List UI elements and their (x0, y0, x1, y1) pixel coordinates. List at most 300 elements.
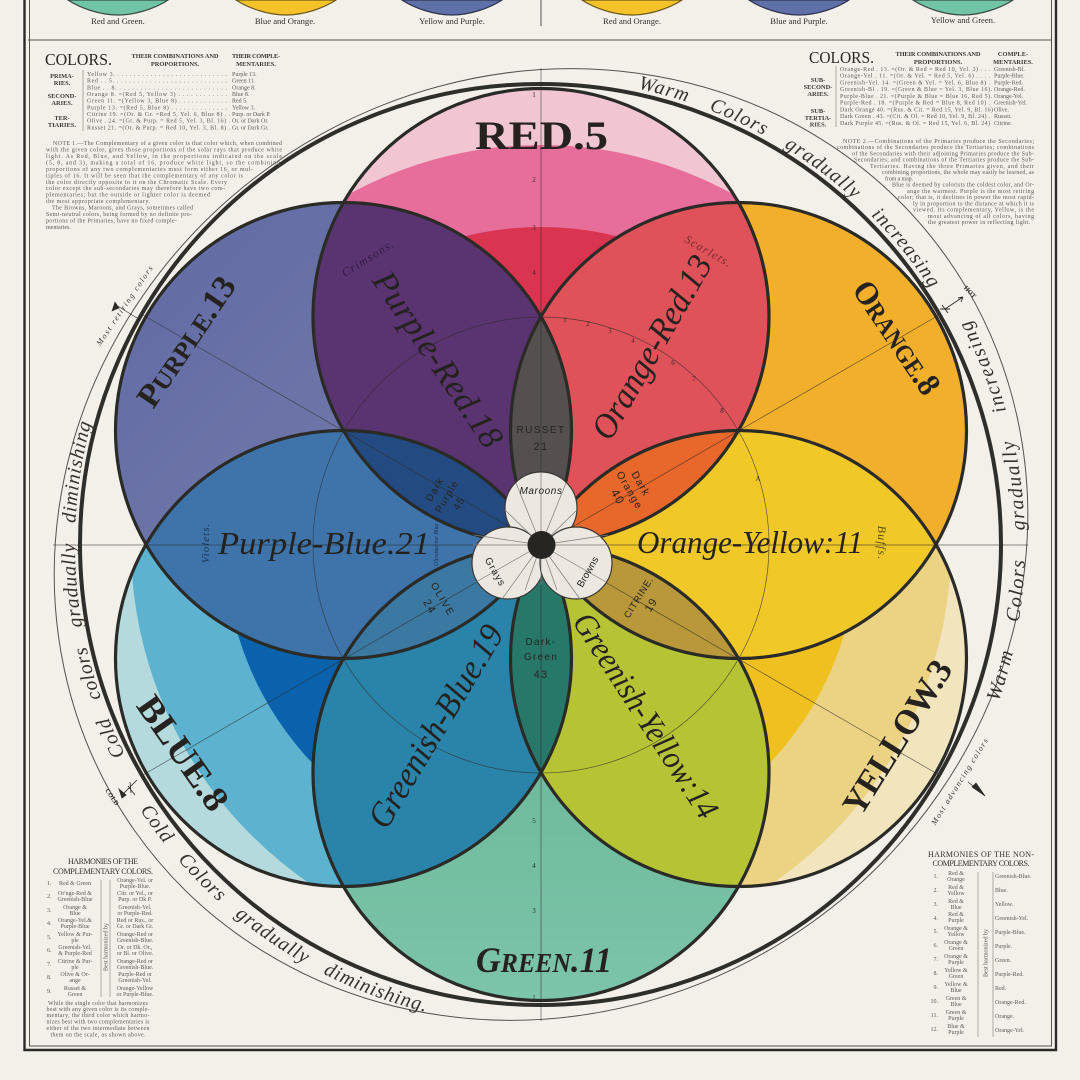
panel: harmonies of the complementary colors: Gr. or Dark Gr. (117, 924, 154, 930)
text block: note 1 (46, 140, 282, 231)
scale numbers: 5 (532, 817, 536, 825)
heading: COMPLEMENTARY COLORS. (53, 867, 153, 876)
text block: note 1: (5, 8, and 3), making a total of 16, produce white light, so the combining (46, 159, 280, 166)
label: Dark Purple: Dark (424, 476, 447, 504)
panel: colors table, left (45, 50, 280, 131)
text block: note 1: color except the sub-secondaries may therefore have two com- (46, 185, 225, 192)
lens: olive (313, 544, 769, 1000)
petal: orange-red (543, 204, 768, 496)
label: Dark Green: Dark- (526, 637, 556, 648)
panel: harmonies of the complementary colors: & Purple-Red (58, 951, 92, 957)
ring text: warm colors, right side: Warm Colors gradually increasing (962, 321, 1029, 698)
heading: COLORS. (809, 48, 874, 67)
panel: harmonies of the non-complementary colors: Yellow. (995, 902, 1014, 908)
top row: harmony swatches (68, 0, 1013, 26)
text block: note 2: ly in proportion to the distance at which it is (913, 201, 1035, 207)
panel: colors table, left: Yellow 3. (232, 105, 256, 111)
text block: note 2: most advancing of all colors, having (928, 213, 1034, 220)
panel: harmonies of the non-complementary colors: 9. (934, 985, 938, 991)
panel: harmonies of the complementary colors: Orange-Red or (117, 932, 153, 938)
panel: harmonies of the complementary colors: Citrine & Pur- (58, 959, 92, 965)
top row: harmony swatches: Red and Orange. (603, 16, 661, 26)
text block: note 1: tiples of 16. It will be seen that the complementary of any color is (46, 172, 244, 179)
label: Citrine: 19 (643, 596, 660, 614)
panel: harmonies of the complementary colors: 9. (47, 989, 52, 995)
panel: harmonies of the complementary colors: Greenish-Yel. (118, 905, 152, 911)
scale numbers: A (755, 475, 761, 483)
panel: colors table, left: SECOND- (48, 93, 76, 100)
lens: dark green (512, 577, 570, 769)
panel: colors table, left: TIARIES. (48, 122, 76, 129)
label: Citrine (622, 575, 669, 628)
panel: harmonies of the complementary colors: 1. (47, 881, 52, 887)
tertiary lenses (116, 88, 966, 1000)
panel: harmonies of the non-complementary colors: Red & (948, 912, 964, 918)
lens: citrine (586, 558, 736, 657)
text block: note 2: Blue is deemed by colorists the coldest color, and Or- (892, 183, 1034, 189)
panel: harmonies of the complementary colors: Orange-Red or (117, 959, 153, 965)
label: Violets: Violets. (200, 523, 212, 563)
panel: colors table, right: COMPLE- (998, 51, 1028, 58)
label: Purple-Blue: Purple-Blue.21 (217, 525, 430, 561)
panel: harmonies of the complementary colors: Or'nge-Red & (58, 891, 92, 897)
scale numbers: 3 (608, 327, 612, 335)
panel: harmonies of the complementary colors: 8. (47, 975, 52, 981)
panel: harmonies of the complementary colors: nizes best with two complementaries is (46, 1020, 150, 1026)
panel: harmonies of the non-complementary colors: Blue. (995, 888, 1008, 894)
text block: note 2: combinations of the Secondaries produce the Tertiaries; combinations (837, 144, 1035, 151)
scale numbers: 4 (532, 862, 536, 870)
panel: harmonies of the non-complementary colors: Orange (947, 877, 965, 883)
panel: colors table, right: Dark Orange 40. =(Rus. & Cit. = Red 15, Yel. 9, Bl. 16) (840, 106, 993, 113)
panel: harmonies of the complementary colors: Olive & Or- (60, 972, 90, 978)
disc: orange (510, 202, 966, 658)
petal: orange-yellow (845, 458, 934, 630)
label: Citrine: CITRINE. (622, 575, 656, 620)
panel: harmonies of the complementary colors: 5. (47, 935, 52, 941)
heading: COMPLEMENTARY COLORS. (932, 859, 1030, 868)
text block: note 1: the color directly opposite to it on the Chromatic Scale. Every (46, 180, 227, 186)
panel: colors table, right: Orange-Red. (994, 87, 1025, 93)
scale numbers: 1 (532, 994, 536, 1002)
text block: note 1: proportions of any two complementaries must form either 16, or mul- (46, 166, 253, 173)
label: Russet: RUSSET (517, 425, 565, 436)
panel: harmonies of the non-complementary colors: Red. (995, 986, 1007, 992)
panel: harmonies of the non-complementary colors: 3. (934, 902, 938, 908)
label: Dark Orange (601, 463, 656, 519)
panel: harmonies of the non-complementary colors: Red & (948, 871, 964, 877)
panel: harmonies of the complementary colors: either of the two intermediate between (46, 1025, 150, 1032)
label: Purple-Red: Purple-Red.18 (364, 264, 510, 455)
panel: colors table, left: Orange 8. =(Red 5, Yellow 3) . . . . . . . . . . . . (87, 91, 228, 98)
text block: note 1: mentaries. (46, 225, 71, 231)
panel: harmonies of the non-complementary colors: 5. (934, 929, 938, 935)
panel: harmonies of the complementary colors: or Purple-Blue. (116, 992, 154, 998)
panel: harmonies of the non-complementary colors: Orange & (944, 926, 968, 932)
text block: note 2: Secondaries; and combinations of the Tertiaries produce the Sub- (854, 157, 1034, 164)
panel: harmonies of the non-complementary colors: Purple (948, 1016, 964, 1022)
panel: colors table, left: Purple 13. (232, 72, 257, 78)
heading: HARMONIES OF THE (68, 857, 138, 866)
panel: harmonies of the non-complementary colors: 1. (934, 874, 938, 880)
panel: harmonies of the complementary colors: Orange-Yel. or (117, 878, 153, 884)
text block: note 2: color; that is, it declines in power the most rapid- (898, 195, 1034, 201)
panel: harmonies of the non-complementary colors: Blue (950, 988, 962, 994)
panel: colors table, left: Russet 21. =(Or. & Purp. = Red 10, Yel. 3, Bl. 8) . (87, 124, 230, 131)
panel: harmonies of the non-complementary colors (928, 850, 1034, 1037)
text block: note 2: of the Secondaries with their adjoining Primaries produce the Sub- (852, 150, 1034, 158)
panel: colors table, left: Citrine 19. =(Or. & Gr. =Red 5, Yel. 6, Blue 8) . . (87, 111, 230, 118)
panel: colors table, right: ARIES. (807, 91, 829, 98)
panel: harmonies of the non-complementary colors: Green & (946, 996, 967, 1002)
panel: harmonies of the complementary colors: Red & Green (59, 881, 91, 887)
petal: purple-red (314, 204, 539, 496)
panel: harmonies of the non-complementary colors: Purple-Red. (995, 972, 1024, 978)
panel: harmonies of the non-complementary colors: Orange & (944, 954, 968, 960)
panel: colors table, left: Gr. or Dark Gr. (232, 125, 269, 131)
panel: harmonies of the complementary colors: Green (68, 992, 82, 998)
panel: harmonies of the non-complementary colors: Yellow & (944, 982, 968, 988)
panel: colors table, left: TER- (54, 115, 70, 122)
label: PURPLE: PURPLE.13 (130, 270, 244, 414)
panel: harmonies of the complementary colors: Greenish-Blue. (117, 965, 154, 971)
label: Ultramarine Blue: Ultramarine Blue (434, 523, 440, 566)
panel: harmonies of the complementary colors: 2. (47, 894, 52, 900)
panel: colors table, right: PROPORTIONS. (914, 59, 963, 66)
panel: colors table, left: Red 5. (232, 99, 248, 105)
panel: harmonies of the non-complementary colors: Greenish-Yel. (995, 916, 1029, 922)
marker: most advancing colors: Most advancing colors (929, 737, 990, 827)
heading (53, 857, 153, 876)
label: Dark Purple: 45 (452, 495, 468, 512)
panel: harmonies of the complementary colors (46, 857, 154, 1038)
disc: purple (116, 202, 572, 658)
panel: colors table, right: Greenish-Yel. 14. =(Green & Yel. = Yel. 6, Blue 8) . (840, 79, 990, 86)
panel: harmonies of the non-complementary colors: 11. (931, 1013, 938, 1019)
scale numbers: 4 (532, 269, 536, 277)
top row: harmony swatches: Yellow and Purple. (419, 16, 485, 26)
panel: harmonies of the non-complementary colors: Green. (995, 958, 1012, 964)
panel: harmonies of the complementary colors: Greenish-Blue (58, 897, 93, 903)
panel: harmonies of the non-complementary colors: Purple. (995, 944, 1013, 950)
lens: dark purple (346, 432, 510, 536)
panel: colors table, right: Greenish-Yel. (994, 101, 1028, 107)
panel: harmonies of the complementary colors: Greenish-Yel. (58, 945, 92, 951)
label: Dark Purple (422, 471, 473, 522)
scale numbers: 6 (671, 359, 675, 367)
panel: harmonies of the non-complementary colors: Purple (948, 1030, 964, 1036)
panel: colors table, left: RIES. (54, 80, 71, 87)
panel: colors table, left: Yellow 3. . . . . . . . . . . . . . . . . . . . . . . . . . . . (87, 72, 228, 78)
panel: colors table, left: MENTARIES. (236, 61, 276, 68)
panel: harmonies of the non-complementary colors: Yellow & (944, 968, 968, 974)
label: Russet: 21 (533, 441, 549, 453)
panel: colors table, right: Purple-Blue. (994, 74, 1025, 80)
petal: greenish-yellow (543, 598, 768, 885)
label: Buffs: Buffs. (875, 526, 889, 560)
label: YELLOW: YELLOW.3 (835, 653, 960, 822)
scale numbers: 8 (720, 407, 724, 415)
text block: note 2 (837, 138, 1035, 226)
panel: harmonies of the non-complementary colors: 10. (930, 999, 938, 1005)
panel: harmonies of the non-complementary colors: Green (949, 974, 963, 980)
text block: note 1: the most appropriate complementary. (46, 199, 150, 205)
label: Olive: 24 (420, 597, 438, 617)
panel: colors table, right: SUB- (811, 77, 825, 84)
marker: hot: HOT (962, 285, 978, 300)
panel: harmonies of the non-complementary colors: Red & (948, 885, 964, 891)
panel: harmonies of the complementary colors: Best harmonized by (104, 923, 110, 971)
label: Dark Green (524, 637, 558, 681)
label: Orange-Yellow: Orange-Yellow:11 (637, 524, 863, 560)
panel: harmonies of the non-complementary colors: Orange. (995, 1014, 1015, 1020)
panel: harmonies of the complementary colors: ple (71, 938, 79, 944)
panel: harmonies of the non-complementary colors: 7. (934, 957, 938, 963)
panel: colors table, left: THEIR COMPLE- (232, 53, 280, 60)
scale numbers: 2 (586, 320, 590, 328)
disc: red with tints (346, 90, 736, 314)
disc: blue with tints (117, 548, 341, 885)
panel: harmonies of the complementary colors: Purp. or Dk P. (118, 897, 152, 903)
marker: hot (940, 285, 978, 313)
panel: harmonies of the non-complementary colors: Orange & (944, 940, 968, 946)
panel: colors table, right: Olive. (994, 107, 1009, 113)
panel: harmonies of the non-complementary colors: 12. (930, 1027, 938, 1033)
panel: harmonies of the non-complementary colors: Purple-Blue. (995, 930, 1026, 936)
petal: greenish-blue (314, 598, 539, 885)
panel: harmonies of the complementary colors: Citr. or Yel., or (117, 891, 153, 897)
panel: colors table, right: Citrine. (994, 121, 1013, 127)
scale numbers: 1 (563, 316, 567, 324)
label: Greenish-Yellow: Greenish-Yellow:14 (565, 606, 725, 826)
panel: harmonies of the non-complementary colors: Blue (950, 905, 962, 911)
panel: harmonies of the complementary colors: or Purple-Red. (117, 911, 153, 917)
text block: note 1: Semi-neutral colors, being formed by no definite pro- (46, 211, 192, 218)
panel: harmonies of the non-complementary colors: Blue (950, 1002, 962, 1008)
panel: colors table, right: RIES. (810, 122, 827, 128)
panel: harmonies of the complementary colors: Blue (69, 911, 81, 917)
label: Orange-Red: Orange-Red.13 (583, 248, 720, 446)
panel: colors table, left: PROPORTIONS. (151, 61, 200, 68)
panel: harmonies of the non-complementary colors: Best harmonized by (984, 929, 990, 977)
scale numbers: 3 (532, 907, 536, 915)
panel: harmonies of the complementary colors: Yellow & Pur- (58, 932, 92, 938)
panel: harmonies of the non-complementary colors: Yellow (947, 932, 965, 938)
ring text: cold colors, bottom: Cold Colors gradually diminishing. (142, 806, 424, 1013)
panel: colors table, right: Purple-Red. (994, 80, 1023, 86)
panel: colors table, right: Russet. (994, 114, 1012, 120)
panel: harmonies of the complementary colors: Greenish-Blue. (117, 938, 154, 944)
panel: harmonies of the non-complementary colors: 6. (934, 943, 938, 949)
panel: harmonies of the non-complementary colors: Greenish-Blue. (995, 874, 1032, 880)
label: Dark Orange: Dark (628, 469, 652, 499)
panel: colors table, right: SECOND- (804, 84, 832, 91)
heading: HARMONIES OF THE NON- (928, 850, 1034, 859)
panel: harmonies of the complementary colors: best with any given color is its comple- (46, 1007, 150, 1013)
top row: harmony swatches: Blue and Purple. (770, 16, 828, 26)
label: BLUE: BLUE.8 (129, 687, 237, 819)
panel: harmonies of the complementary colors: 4. (47, 921, 52, 927)
panel: harmonies of the complementary colors: 7. (47, 962, 52, 968)
panel: harmonies of the complementary colors: Greenish-Yel. (118, 978, 152, 984)
label: Dark Green: 43 (534, 669, 548, 681)
panel: harmonies of the non-complementary colors: Blue & (947, 1024, 965, 1030)
panel: colors table, left: Green 11. (232, 79, 256, 85)
panel: harmonies of the complementary colors: Russet & (64, 986, 86, 992)
panel: colors table, left: PRIMA- (50, 73, 74, 80)
panel: harmonies of the complementary colors: or Bl. or Olive. (117, 951, 154, 957)
panel: colors table, left: Purple 13. =(Red 5, Blue 8) . . . . . . . . . . . . . . (87, 104, 228, 111)
panel: colors table, right: Dark Purple 45. =(Rus. & Ol. = Red 15, Yel. 6, Bl. 24) (840, 120, 990, 127)
top row: harmony swatches: Yellow and Green. (931, 15, 995, 25)
panel: harmonies of the non-complementary colors: Yellow (947, 891, 965, 897)
disc: yellow with tints (741, 548, 965, 885)
top row: harmony swatches: Red and Green. (91, 16, 145, 26)
text block: note 2: viewed. Its complementary, Yellow, is the (913, 208, 1034, 214)
scale numbers: 7 (692, 375, 696, 383)
scale numbers (532, 91, 761, 1002)
text block: note 1: portions of the Primaries, have no fixed comple- (46, 218, 177, 224)
disc: green (313, 544, 769, 1000)
panel: colors table, left: Blue 8. (232, 92, 250, 98)
panel: harmonies of the complementary colors: them on the scale, as shown above. (50, 1032, 146, 1038)
label: Dark Green: Green (524, 652, 558, 663)
text block: note 1: light. As Red, Blue, and Yellow, in the proportions indicated on the scale (46, 154, 282, 160)
panel: harmonies of the non-complementary colors: 4. (934, 916, 938, 922)
panel: colors table, left: Purp. or Dark P. (232, 112, 271, 118)
panel: colors table, left: Or. or Dark Or. (232, 119, 269, 125)
panel: harmonies of the complementary colors: Purple-Red or (118, 972, 152, 978)
text block: note 2: NOTE 2.—Combinations of the Primaries produce the Secondaries; (843, 138, 1034, 145)
thick outer circle (80, 84, 1001, 1005)
panel: harmonies of the complementary colors: Orange & (63, 905, 87, 911)
ring text: warm colors, upper right: Warm Colors gradually increasing (642, 76, 938, 288)
panel: colors table, right: THEIR COMBINATIONS AND (896, 51, 981, 58)
lens: dark orange (572, 432, 736, 535)
scale numbers: 4 (631, 337, 635, 345)
text block: note 2: combining proportions, the whole may easily be learned, as (882, 170, 1035, 176)
panel: colors table, left: Green 11. =(Yellow 3, Blue 8) . . . . . . . . . . . . (87, 98, 228, 105)
panel: colors table, left: Red . . 5. . . . . . . . . . . . . . . . . . . . . . . . . . . . (87, 79, 228, 85)
panel: harmonies of the non-complementary colors: 8. (934, 971, 938, 977)
centre dot (528, 531, 556, 559)
panel: colors table, left: Blue . . 8. . . . . . . . . . . . . . . . . . . . . . . . . . . (87, 85, 228, 91)
top row: harmony swatches: Blue and Orange. (255, 16, 315, 26)
panel: harmonies of the complementary colors: 6. (47, 948, 52, 954)
panel: harmonies of the non-complementary colors: Orange-Yel. (995, 1028, 1025, 1034)
panel: harmonies of the non-complementary colors: Green & (946, 1010, 967, 1016)
label: GREEN: GREEN.11 (476, 940, 612, 980)
panel: harmonies of the complementary colors: 3. (47, 908, 52, 914)
panel: harmonies of the complementary colors: ple (71, 965, 79, 971)
heading: COLORS. (45, 50, 112, 69)
panel: harmonies of the complementary colors: ange (69, 978, 81, 984)
panel: colors table, right: Orange-Yel . 11. =(Or. & Yel. = Red 5, Yel. 6) . . . . (840, 73, 990, 80)
text block: note 1: The Browns, Maroons, and Grays, sometimes called (52, 206, 193, 212)
ring text: cold colors, left side: Cold colors gradually diminishing (61, 421, 123, 757)
panel: harmonies of the complementary colors: Purple-Blue. (120, 884, 151, 890)
panel: harmonies of the complementary colors: Orange-Yellow (117, 986, 154, 992)
label: Scarlets: Scarlets. (682, 232, 735, 270)
primary and secondary colour discs (116, 88, 966, 1000)
panel: harmonies of the non-complementary colors: Green (949, 946, 963, 952)
panel: colors table, right: Dark Green . 43. =(Cit. & Ol. = Red 10, Yel. 9, Bl. 24) . (840, 113, 990, 120)
label: Greenish-Blue: Greenish-Blue.19 (360, 618, 512, 835)
label: RED: RED.5 (475, 113, 608, 158)
panel: colors table, left: THEIR COMBINATIONS AND (132, 53, 219, 60)
panel: colors table, left: Olive . 24. =(Gr. & Purp. = Red 5, Yel. 3, Bl. 16) . (87, 118, 230, 125)
panel: colors table, right: Greenish-Bl. (994, 67, 1025, 73)
heading (928, 850, 1034, 868)
label: Browns: Browns (575, 555, 602, 589)
label: ORANGE: ORANGE.8 (845, 274, 947, 402)
marker: cold: COLD (103, 788, 120, 807)
panel: colors table, left: ARIES. (51, 100, 73, 107)
circle outlines (116, 88, 966, 1000)
lens: russet (512, 320, 570, 480)
label: Grays: Grays (482, 556, 507, 589)
panel: harmonies of the complementary colors: While the single color that harmonizes (48, 1001, 149, 1007)
panel: colors table, right (804, 48, 1033, 128)
panel: colors table, right: TERTIA- (805, 115, 831, 122)
label: Dark Purple: Purple (434, 478, 461, 515)
text block: note 1: plementaries; but the outside or lighter color is deemed (46, 193, 210, 199)
panel: harmonies of the non-complementary colors: Purple (948, 918, 964, 924)
label: Crimsons: Crimsons. (339, 236, 397, 280)
label: Olive: OLIVE (428, 581, 456, 619)
panel: harmonies of the non-complementary colors: Orange-Red. (995, 1000, 1026, 1006)
label: Olive (415, 581, 456, 626)
panel: harmonies of the non-complementary colors: 2. (934, 888, 938, 894)
panel: harmonies of the complementary colors: mentary, the third color which harmo- (46, 1013, 150, 1019)
label: Dark Orange: Orange (613, 469, 645, 512)
panel: harmonies of the complementary colors: Red or Rus., or (117, 918, 153, 924)
text block: note 2: the greatest power in reflecting light. (928, 219, 1030, 226)
panel: harmonies of the non-complementary colors: Red & (948, 899, 964, 905)
panel: harmonies of the non-complementary colors: Purple (948, 960, 964, 966)
text block: note 2: Tertiaries. Having the three Primaries given, and their (870, 164, 1034, 170)
text block: note 2: from a map. (885, 175, 914, 182)
scale numbers: 3 (532, 224, 536, 232)
label: Dark Orange: 40 (608, 487, 628, 507)
text block: note 2: ange the warmest. Purple is the most retiring (907, 189, 1034, 195)
panel: colors table, right: Orange-Yel. (994, 94, 1024, 100)
label: Russet (517, 425, 565, 453)
text block: note 1: NOTE 1.—The Complementary of a given color is that color which, when combined (53, 140, 282, 147)
panel: colors table, left: Orange 8. (232, 85, 256, 91)
outer thin ring (54, 69, 1028, 1020)
panel: colors table, right: MENTARIES. (993, 59, 1033, 66)
marker: most retiring colors: Most retiring colors (94, 264, 155, 348)
label: Maroons: Maroons (519, 486, 563, 497)
scale lines (53, 68, 1028, 1021)
panel: colors table, right: Purple-Red . 18. =(Purple & Red = Blue 8, Red 10) . (840, 100, 990, 107)
marker: cold (103, 780, 137, 807)
scale numbers: 1 (532, 91, 536, 99)
panel: colors table, right: Orange-Red . 13. =(Or. & Red = Red 10, Yel. 3) . . . (840, 66, 990, 73)
petal: purple-blue (148, 432, 481, 657)
scale numbers: 2 (532, 176, 536, 184)
overlap petals (116, 88, 966, 1000)
panel: harmonies of the complementary colors: Orange-Yel.& (58, 918, 92, 924)
text block: note 1: with the given color, gives those proportions of the solar rays that produce white (46, 146, 282, 154)
panel: colors table, right: Purple-Blue . 21. =(Purple & Blue = Blue 16, Red 5). (840, 93, 992, 100)
panel: colors table, right: SUB- (811, 108, 825, 115)
panel: harmonies of the complementary colors: Or. or Dk. Or., (118, 945, 153, 951)
panel: harmonies of the complementary colors: Purple-Blue (60, 924, 90, 930)
panel: colors table, right: Greenish-Bl . 19. =(Green & Blue = Yel. 3, Blue 16). (840, 86, 992, 93)
centre trefoil (472, 472, 612, 599)
